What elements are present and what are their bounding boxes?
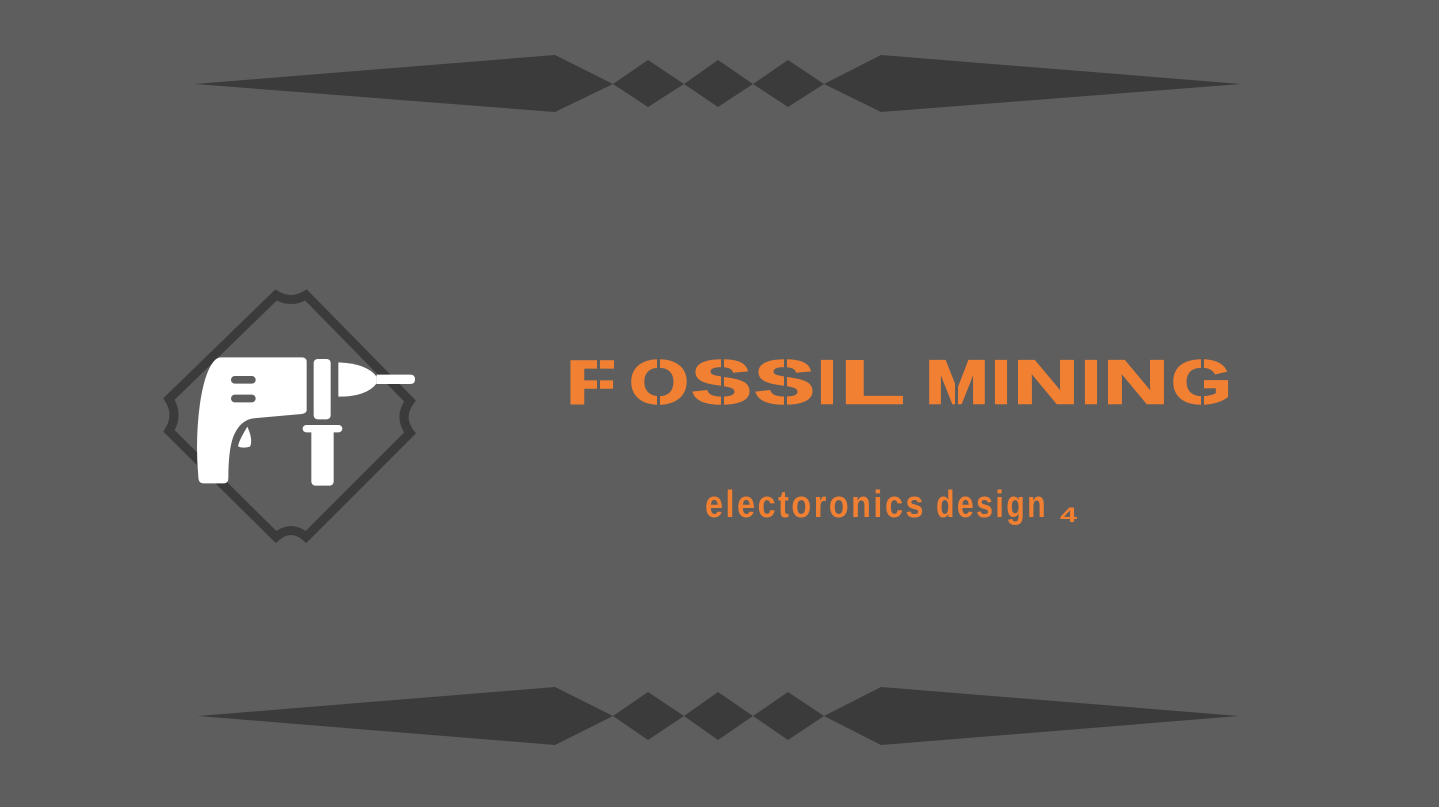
top ornament [195,55,1241,112]
title: I [1081,348,1101,418]
subtitle number: 4 [1060,504,1077,527]
title: O [629,348,689,418]
title: S [691,348,752,418]
bottom ornament [198,687,1239,745]
logo: drill in diamond frame [169,295,415,537]
title: I [991,348,1011,418]
title: N [1013,348,1079,418]
title: F [566,348,616,418]
title: I [817,348,837,418]
title: L [840,348,903,418]
subtitle: design [936,484,1048,526]
title: G [1171,348,1232,418]
title: N [1103,348,1169,418]
subtitle: electoronics [705,484,926,526]
title: S [754,348,815,418]
icon: diamond frame [169,295,410,537]
title: M [925,348,989,418]
icon: drill [197,357,415,486]
